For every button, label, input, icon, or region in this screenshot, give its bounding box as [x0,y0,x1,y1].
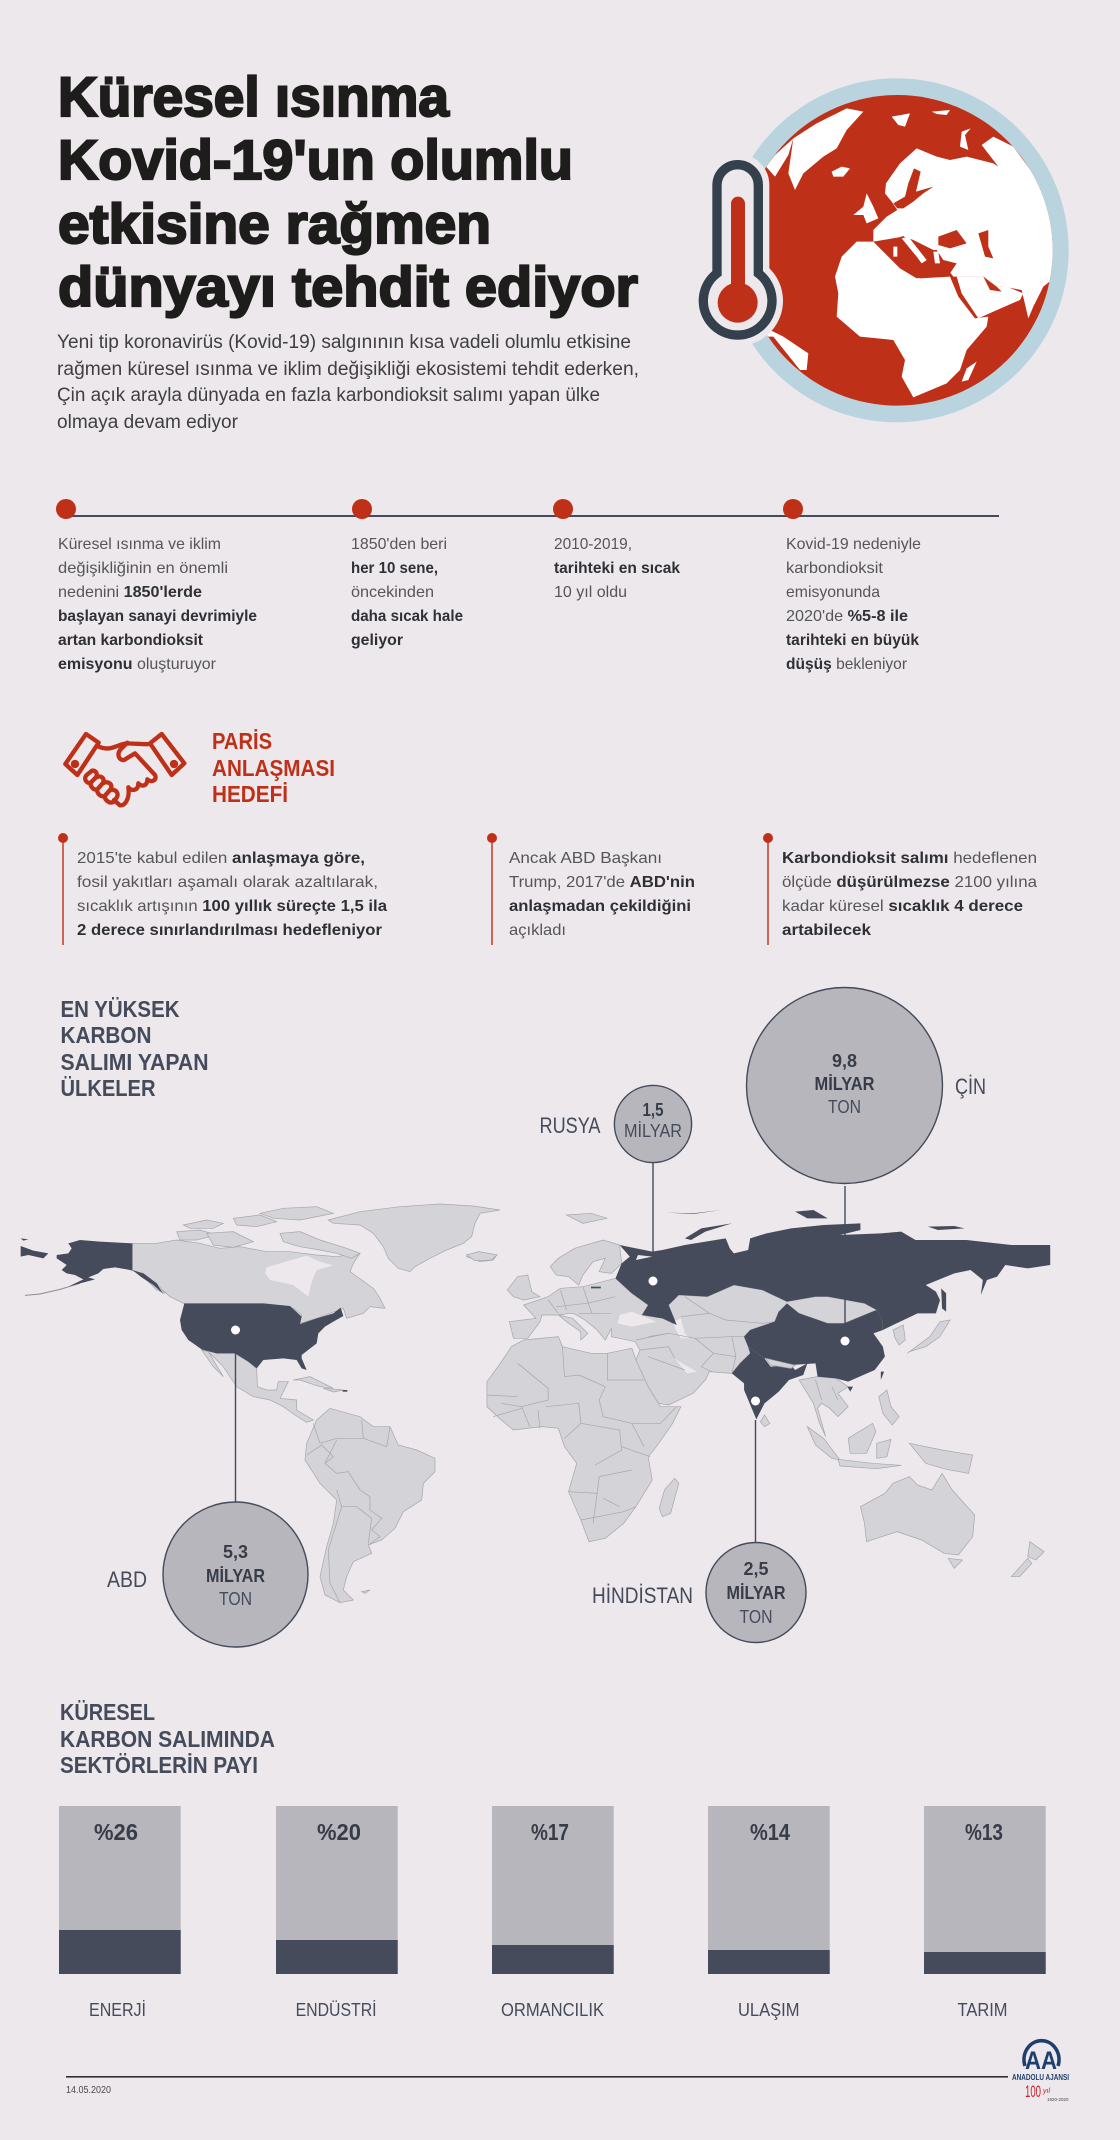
title: Kovid-19'un olumlu [58,128,573,191]
heading: Paris Agreement: PARİS [212,728,272,754]
timeline item 3: 2010-2019, [554,536,632,553]
timeline item 1: değişikliğinin en önemli [58,560,228,577]
callout: India: HİNDİSTAN [592,1583,693,1608]
callout: USA: TON [219,1589,252,1609]
Paris item 3: Karbondioksit salımı hedeflenen [782,850,1037,867]
intro text: Yeni tip koronavirüs (Kovid-19) salgınının kısa vadeli olumlu etkisine [57,332,631,353]
title: dünyayı tehdit ediyor [58,255,638,318]
callout: USA [107,1326,308,1647]
Paris item 1: 2015'te kabul edilen anlaşmaya göre, [77,850,365,867]
callout: China: ÇİN [955,1074,986,1099]
bar: agriculture: %13 [965,1819,1003,1845]
heading: Paris Agreement: HEDEFİ [212,781,288,807]
bar: transport: ULAŞIM [738,2000,800,2020]
timeline item 2 [351,499,463,649]
callout: India [592,1396,806,1642]
callout: China: 9,8 [832,1051,857,1071]
footer: 14.05.2020 [66,2085,111,2096]
timeline item 1: Küresel ısınma ve iklim [58,536,221,553]
heading: top emitters: ÜLKELER [60,1075,156,1101]
timeline [56,499,999,673]
heading: sector share: SEKTÖRLERİN PAYI [60,1752,258,1778]
logo: Anadolu Ajansi: ANADOLU AJANSI [1012,2072,1069,2082]
timeline item 4: 2020'de %5-8 ile [786,608,908,625]
timeline item 4: karbondioksit [786,560,884,577]
logo: Anadolu Ajansi: 1920-2020 [1047,2097,1069,2102]
timeline item 2: geliyor [351,632,403,649]
timeline item 2: her 10 sene, [351,560,438,577]
Paris item 3 [763,833,1037,945]
timeline item 3: tarihteki en sıcak [554,560,680,577]
timeline item 4: düşüş bekleniyor [786,656,908,673]
bar: agriculture [924,1806,1046,2020]
bar: agriculture: TARIM [958,2000,1008,2020]
bar: forestry: %17 [531,1819,569,1845]
timeline item 2: 1850'den beri [351,536,447,553]
timeline item 1 [56,499,257,673]
Paris item 3: ölçüde düşürülmezse 2100 yılına [782,874,1037,891]
Russia, China, India highlighted [591,1210,1050,1419]
Paris item 1 [58,833,387,945]
icon: thermometer [703,165,772,335]
callout: Russia: MİLYAR [624,1121,682,1141]
bar: forestry [492,1806,614,2020]
timeline item 3 [553,499,680,601]
bar: energy: ENERJİ [89,2000,146,2020]
timeline item 3: 10 yıl oldu [554,584,627,601]
USA and Alaska highlighted [21,1238,347,1392]
world map: Europe, Africa, Asia, Oceania [467,1210,1050,1577]
callout: India: MİLYAR [726,1583,786,1603]
bar: forestry: ORMANCILIK [501,2000,604,2020]
Paris item 1: 2 derece sınırlandırılması hedefleniyor [77,922,382,939]
title: Küresel ısınma [58,65,450,128]
timeline item 4: emisyonunda [786,584,880,601]
callout: China: TON [828,1097,861,1117]
heading: top emitters [60,996,208,1101]
timeline item 1: emisyonu oluşturuyor [58,656,217,673]
heading: sector share: KARBON SALIMINDA [60,1726,275,1752]
Paris item 1: fosil yakıtları aşamalı olarak azaltılarak, [77,874,378,891]
callout: Russia: RUSYA [540,1113,601,1138]
intro text: Çin açık arayla dünyada en fazla karbondioksit salımı yapan ülke [57,385,600,406]
Paris item 2 [487,833,695,945]
timeline item 1: nedenini 1850'lerde [58,584,202,601]
callout: USA: ABD [107,1567,147,1592]
callout: USA: MİLYAR [206,1566,265,1586]
Paris item 2: anlaşmadan çekildiğini [509,898,691,915]
bar: transport: %14 [750,1819,790,1845]
Paris item 2: açıkladı [509,922,566,939]
timeline item 4 [783,499,921,673]
heading: sector share [60,1699,275,1778]
Paris item 2: Trump, 2017'de ABD'nin [509,874,695,891]
heading: top emitters: EN YÜKSEK [60,996,180,1022]
timeline item 1: artan karbondioksit [58,632,204,649]
timeline item 2: daha sıcak hale [351,608,463,625]
heading: sector share: KÜRESEL [60,1699,155,1725]
logo: Anadolu Ajansi: AA [1025,2047,1057,2075]
callout: India: 2,5 [744,1559,768,1579]
icon: globe with thermometer [703,78,1069,422]
title: etkisine rağmen [58,192,491,255]
timeline item 2: öncekinden [351,584,434,601]
icon: handshake [65,734,184,805]
logo: Anadolu Ajansi [1012,2041,1069,2102]
bar: industry: ENDÜSTRİ [296,2000,377,2020]
bar: industry [276,1806,398,2020]
bar: energy: %26 [94,1819,138,1845]
Paris item 1: sıcaklık artışının 100 yıllık süreçte 1,5 ila [77,898,387,915]
bar: energy [59,1806,181,2020]
heading: top emitters: SALIMI YAPAN [60,1049,208,1075]
callout: Russia [540,1085,692,1286]
logo: Anadolu Ajansi: 100 [1025,2083,1041,2101]
heading: Paris Agreement [212,728,335,807]
intro text: rağmen küresel ısınma ve iklim değişikliği ekosistemi tehdit ederken, [57,359,639,380]
timeline item 4: Kovid-19 nedeniyle [786,536,921,553]
callout: USA: 5,3 [223,1542,248,1562]
callout: Russia: 1,5 [642,1100,664,1120]
logo: Anadolu Ajansi: yıl [1042,2088,1050,2095]
heading: top emitters: KARBON [60,1022,152,1048]
title [58,65,638,318]
bar: industry: %20 [317,1819,361,1845]
Paris item 2: Ancak ABD Başkanı [509,850,662,867]
intro text [57,332,639,433]
intro text: olmaya devam ediyor [57,412,239,433]
callout: China [746,988,986,1346]
Paris item 3: artabilecek [782,922,871,939]
Paris item 3: kadar küresel sıcaklık 4 derece [782,898,1023,915]
timeline item 1: başlayan sanayi devrimiyle [58,608,257,625]
callout: India: TON [740,1607,772,1627]
world map: Americas [21,1204,500,1603]
bar chart: sectors [59,1806,1046,2020]
heading: Paris Agreement: ANLAŞMASI [212,755,335,781]
bar: transport [708,1806,830,2020]
callout: China: MİLYAR [814,1074,874,1094]
timeline item 4: tarihteki en büyük [786,632,919,649]
